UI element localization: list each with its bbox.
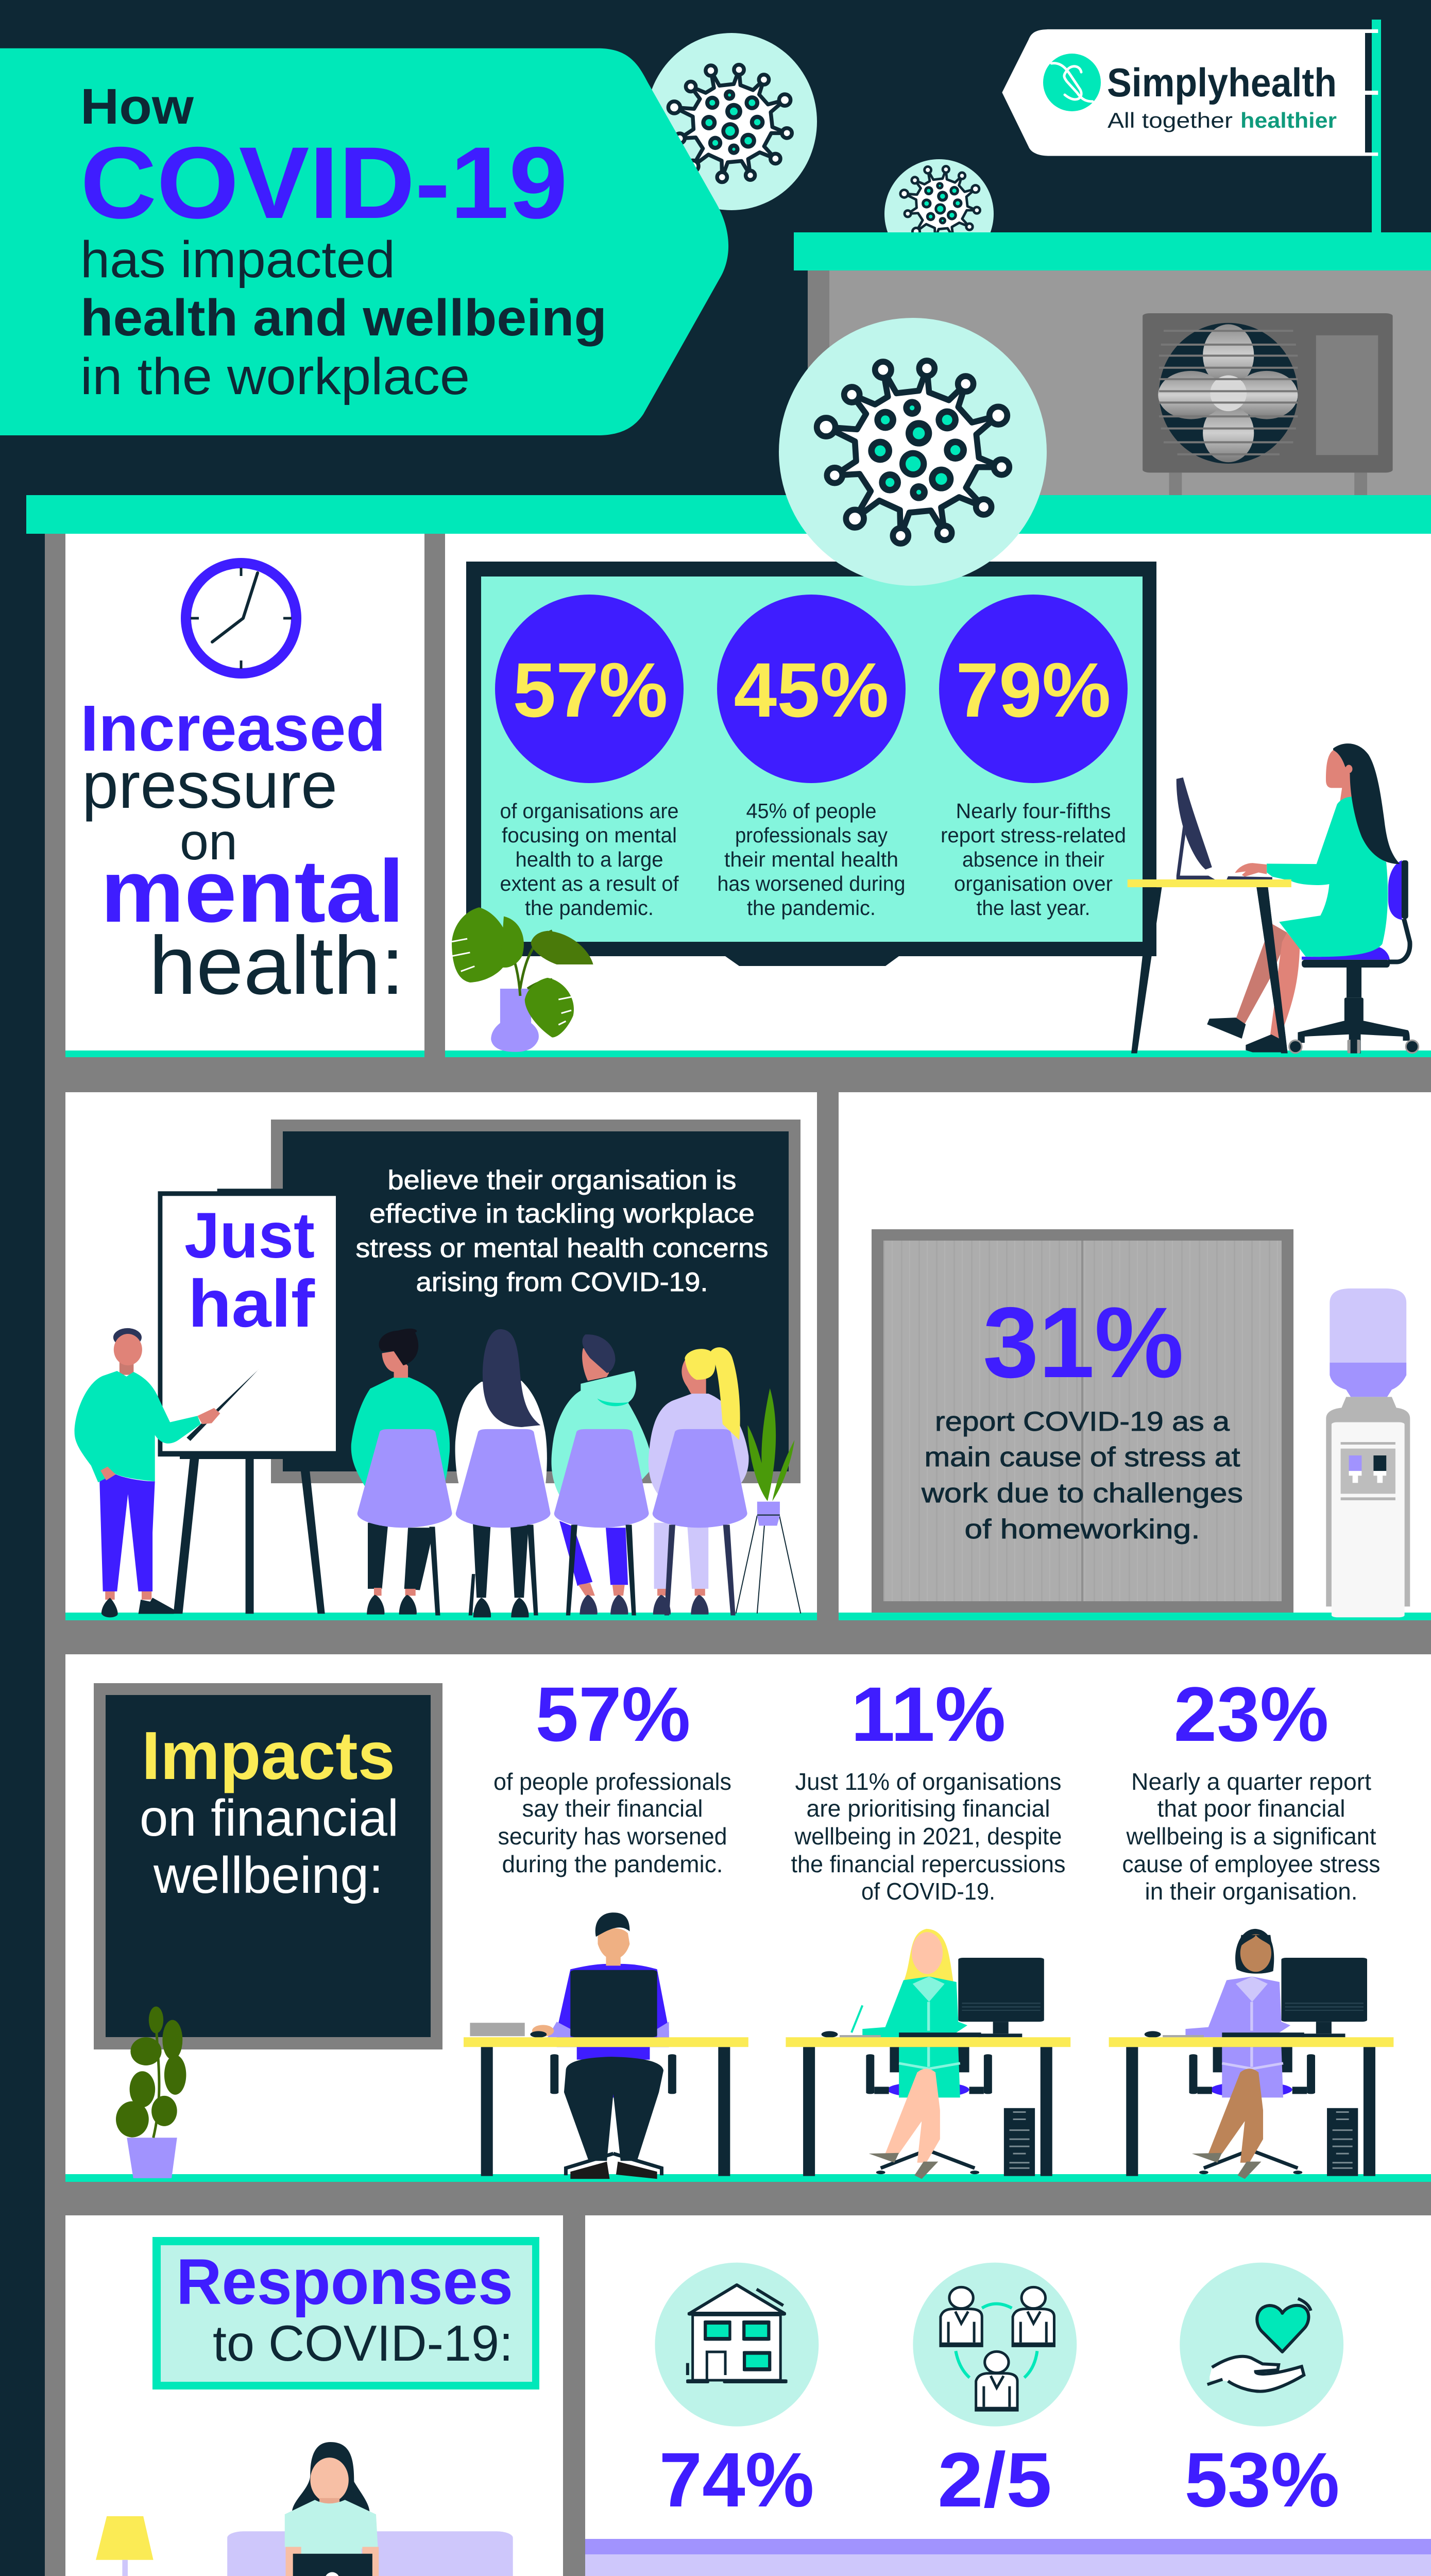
- impacts board: wellbeing:: [153, 1846, 383, 1904]
- icon: heart in hand: [1180, 2263, 1343, 2427]
- stat: 45%: professionals say: [735, 823, 888, 847]
- stat: 79%: [939, 595, 1128, 920]
- stat: 79%: absence in their: [962, 848, 1104, 871]
- stat: 11% prioritising: are prioritising financial: [807, 1795, 1050, 1822]
- blackboard: [271, 1120, 800, 1483]
- title banner: [0, 48, 728, 435]
- title banner: has impacted: [80, 231, 395, 289]
- panel: just half presentation: [65, 1092, 817, 1620]
- audience of four on chairs: [351, 1329, 800, 1617]
- stat: 45%: [717, 595, 906, 920]
- stat: 57% financial security: security has worsened: [498, 1823, 727, 1850]
- title banner: health and wellbeing: [80, 289, 607, 347]
- stat: 45%: 45%: [734, 647, 889, 733]
- stat: 11% prioritising: [791, 1671, 1065, 1905]
- impacts board: Impacts: [142, 1718, 395, 1793]
- stat: 57% financial security: [493, 1671, 731, 1877]
- stat: 57%: of organisations are: [500, 799, 679, 823]
- flag with Simplyhealth logo: healthier: [1240, 108, 1337, 132]
- stat: 79%: Nearly four-fifths: [956, 799, 1111, 823]
- blackboard text: [355, 1165, 769, 1297]
- heading text: [80, 692, 404, 1011]
- flip chart: [158, 1189, 336, 1614]
- stat: 53%: 53%: [1185, 2436, 1339, 2523]
- stat: 45%: 45% of people: [746, 799, 877, 823]
- header ledge: [26, 495, 1431, 534]
- flip chart: Just: [184, 1200, 315, 1272]
- stat text: work due to challenges: [921, 1478, 1243, 1509]
- rooftop with air conditioning unit: [794, 232, 1431, 496]
- stat: 57% financial security: of people professionals: [493, 1768, 731, 1795]
- stat: 23% poor wellbeing: in their organisation.: [1145, 1878, 1358, 1905]
- icon: virus top: [646, 33, 817, 210]
- heading text: on: [180, 813, 237, 871]
- stat: 74%: 74%: [659, 2436, 814, 2523]
- person one: [351, 1329, 452, 1616]
- icon: plant in pot: [116, 2007, 186, 2178]
- flag with Simplyhealth logo: [1002, 20, 1381, 232]
- stat text: [921, 1286, 1243, 1545]
- person four: [649, 1347, 749, 1616]
- stat: 45%: the pandemic.: [747, 896, 876, 920]
- man at desk with laptop: [464, 1912, 748, 2179]
- stat: 57% financial security: 57%: [536, 1671, 690, 1757]
- stat: 11% prioritising: 11%: [851, 1671, 1006, 1757]
- potted plant on stand: [736, 1388, 800, 1614]
- heading text: pressure: [82, 749, 337, 822]
- stat: 23% poor wellbeing: cause of employee stress: [1122, 1851, 1381, 1877]
- stat: 23% poor wellbeing: 23%: [1173, 1671, 1329, 1757]
- stat: 2/5: 2/5: [938, 2436, 1052, 2523]
- icon: three people connected: [913, 2263, 1077, 2427]
- stat: 57%: 57%: [513, 647, 668, 733]
- heading text: mental: [100, 842, 404, 941]
- stat: 57%: extent as a result of: [500, 872, 679, 895]
- stat text: main cause of stress at: [924, 1442, 1240, 1472]
- stat: 11% prioritising: wellbeing in 2021, despite: [794, 1823, 1062, 1850]
- panel: increased pressure heading: [65, 534, 424, 1057]
- stat: 23% poor wellbeing: wellbeing is a significant: [1126, 1823, 1376, 1850]
- woman with blonde hair at desk: [786, 1929, 1070, 2179]
- responses heading box: Responses: [176, 2246, 513, 2318]
- icon: monstera plant in vase: [452, 907, 593, 1052]
- flag with Simplyhealth logo: Simplyhealth: [1107, 60, 1337, 105]
- icon: virus large: [779, 318, 1047, 586]
- panel: responses statistics: [585, 2215, 1431, 2576]
- stat: 23% poor wellbeing: [1122, 1671, 1381, 1905]
- woman with laptop on sofa: [199, 2442, 540, 2576]
- icon: virus small: [884, 159, 994, 268]
- blackboard text: believe their organisation is: [387, 1165, 737, 1195]
- responses heading box: to COVID-19:: [213, 2315, 513, 2371]
- stat: 45%: their mental health: [724, 848, 898, 871]
- lamp on bedside cabinet: [73, 2516, 174, 2576]
- flag with Simplyhealth logo: All together: [1108, 108, 1233, 132]
- heading text: Increased: [80, 692, 386, 765]
- blackboard text: stress or mental health concerns: [355, 1233, 769, 1263]
- stat: 57%: [495, 595, 684, 920]
- stat: 79%: report stress-related: [941, 823, 1126, 847]
- wall screen: [466, 562, 1156, 966]
- title banner: How: [80, 78, 194, 134]
- dark left wall column: [0, 495, 45, 2576]
- stat: 57% financial security: say their financial: [522, 1795, 703, 1822]
- flip chart: half: [188, 1266, 315, 1341]
- person three: [551, 1334, 653, 1616]
- impacts board: on financial: [140, 1789, 399, 1847]
- stat: 11% prioritising: the financial repercussions: [791, 1851, 1065, 1877]
- woman with dark hair at desk: [1109, 1929, 1393, 2179]
- stat: 57%: focusing on mental: [502, 823, 677, 847]
- lift doors: [872, 1229, 1293, 1613]
- panel: 31% homeworking stress: [839, 1092, 1431, 1620]
- icon: clock: [186, 563, 296, 673]
- heading text: health:: [149, 919, 404, 1011]
- stat: 2/5: [888, 2436, 1102, 2576]
- icon: house: [655, 2263, 819, 2427]
- panel: mental health screen: [445, 534, 1431, 1057]
- panel: responses heading and woman on sofa: [65, 2215, 563, 2576]
- person two: [455, 1329, 551, 1617]
- stat: 74%: [635, 2436, 839, 2576]
- stat: 57%: health to a large: [515, 848, 663, 871]
- woman working at desk: [1128, 743, 1419, 1054]
- stat: 11% prioritising: Just 11% of organisations: [795, 1768, 1061, 1795]
- presenter: [75, 1328, 259, 1617]
- title banner: in the workplace: [80, 348, 470, 405]
- stat: 45%: has worsened during: [717, 872, 906, 895]
- stat text: report COVID-19 as a: [935, 1406, 1230, 1437]
- stat: 57% financial security: during the pandemic.: [502, 1851, 723, 1877]
- dark header band: [0, 0, 1431, 495]
- water cooler: [1326, 1289, 1410, 1617]
- responses heading box: [152, 2237, 539, 2389]
- title banner: COVID-19: [80, 126, 568, 240]
- stat: 79%: the last year.: [977, 896, 1090, 920]
- blackboard text: arising from COVID-19.: [416, 1267, 708, 1297]
- panel: impacts on financial wellbeing: [65, 1654, 1431, 2182]
- stat: 11% prioritising: of COVID-19.: [861, 1878, 995, 1905]
- stat: 79%: 79%: [956, 647, 1111, 733]
- impacts board: [94, 1683, 442, 2049]
- stat: 23% poor wellbeing: that poor financial: [1157, 1795, 1345, 1822]
- stat: 23% poor wellbeing: Nearly a quarter report: [1131, 1768, 1371, 1795]
- stat text: 31%: [983, 1286, 1184, 1399]
- stat: 53%: [1152, 2436, 1372, 2576]
- stat: 57%: the pandemic.: [525, 896, 654, 920]
- stat: 79%: organisation over: [954, 872, 1113, 895]
- stat text: of homeworking.: [964, 1514, 1200, 1545]
- blackboard text: effective in tackling workplace: [369, 1199, 755, 1229]
